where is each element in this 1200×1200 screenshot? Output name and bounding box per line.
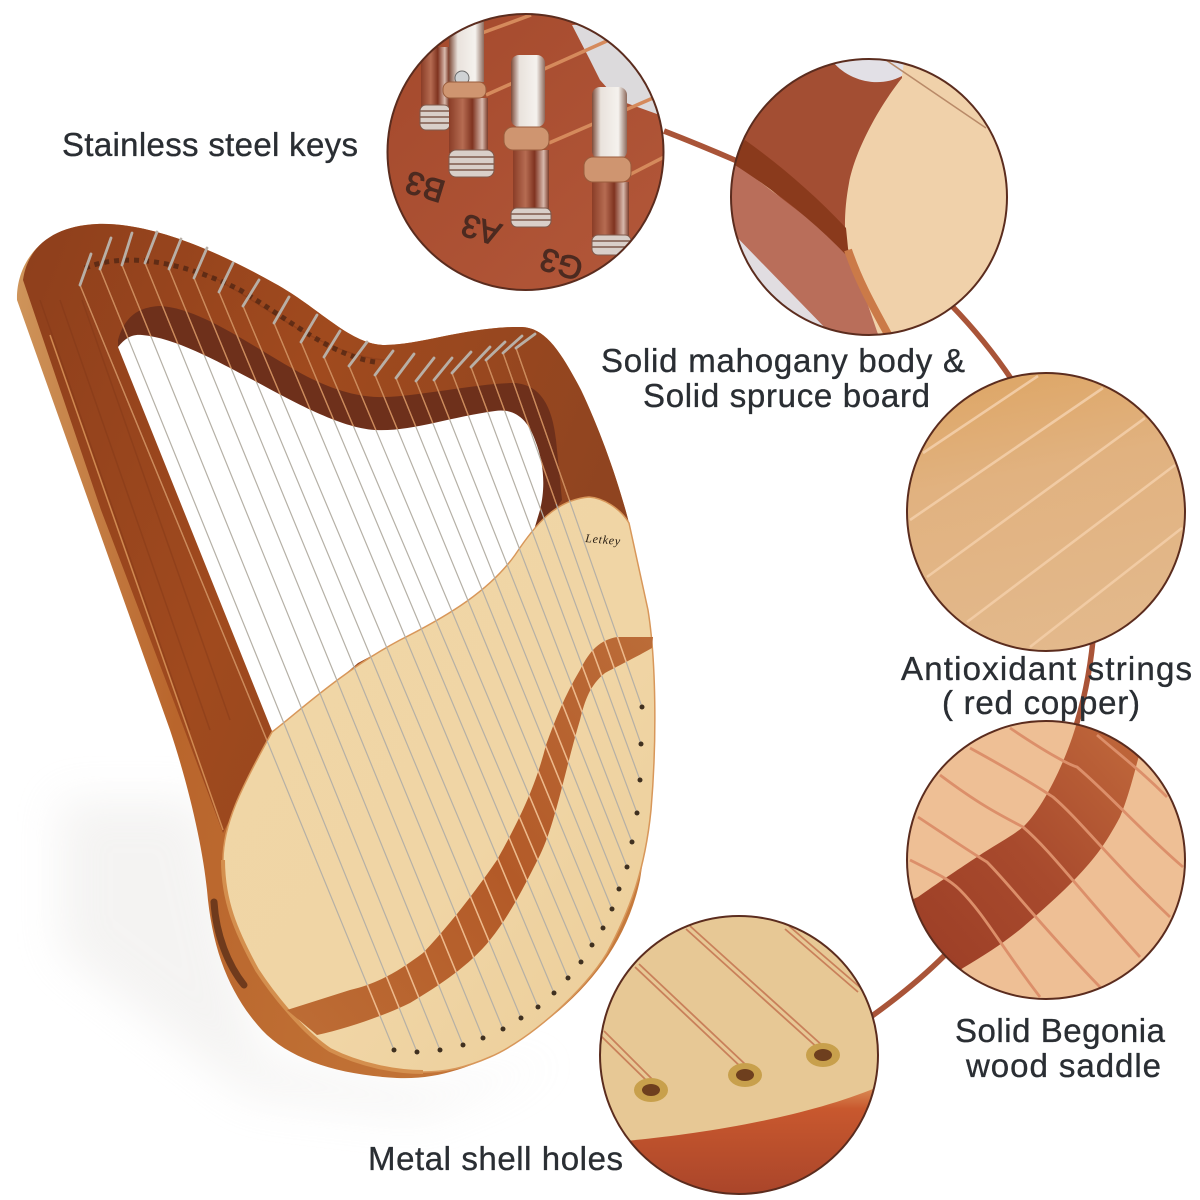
- orange edge: [848, 250, 890, 338]
- detail circle: metal shell holes: [600, 916, 880, 1200]
- frame groove line: [50, 335, 223, 830]
- harp body side: [17, 224, 655, 1078]
- label: mahogany body and spruce board: Solid mahogany body &: [601, 342, 965, 379]
- label: mahogany body and spruce board: Solid spruce board: [643, 377, 930, 414]
- key number markings: A3: [457, 207, 505, 253]
- soundboard: [223, 497, 655, 1072]
- key strings: [482, 15, 666, 175]
- label: saddle: Solid Begonia: [955, 1012, 1166, 1049]
- frame opening: [118, 335, 543, 731]
- label: strings: Antioxidant strings: [901, 650, 1192, 687]
- soundboard lower rim: [223, 860, 423, 1072]
- copper strings: [910, 376, 1182, 647]
- label: strings: [901, 650, 1192, 721]
- background gap lower left: [738, 239, 824, 326]
- tuning pegs: [80, 232, 535, 381]
- label: saddle: [955, 1012, 1166, 1084]
- double strings: [600, 926, 862, 1082]
- saddle: [287, 637, 653, 1035]
- label: mahogany body and spruce board: [601, 342, 965, 414]
- background gap: [572, 24, 658, 114]
- peg holes row: [85, 260, 375, 362]
- dark ridge: [730, 140, 849, 258]
- mahogany side: [732, 166, 878, 334]
- side sound hole: [214, 902, 244, 985]
- key 2: [443, 10, 494, 177]
- mahogany face: [743, 64, 902, 227]
- inner bevel of frame: [118, 306, 562, 530]
- upper string: [886, 60, 986, 128]
- soft shadow under harp: [60, 800, 560, 1115]
- string holes: [392, 704, 644, 1054]
- top gap: [835, 60, 904, 82]
- strings over frame: [80, 264, 570, 742]
- strings: [80, 263, 642, 1052]
- harp front frame: [23, 224, 629, 833]
- detail circle: begonia saddle: [900, 721, 1185, 999]
- key number markings: G3: [536, 241, 587, 288]
- brand logo: Letkey: [584, 531, 621, 548]
- label: saddle: wood saddle: [965, 1047, 1161, 1084]
- key 4: [584, 87, 631, 255]
- key number markings: [406, 172, 582, 279]
- strings over saddle: [366, 637, 627, 1016]
- label: stainless steel keys: Stainless steel keys: [62, 126, 358, 163]
- brass eyelets: [634, 1043, 840, 1102]
- body rim: [630, 1089, 873, 1193]
- label: strings: ( red copper): [942, 684, 1140, 721]
- key number markings: B3: [401, 164, 449, 210]
- saddle band: [914, 725, 1138, 969]
- back key: [420, 47, 450, 130]
- saddle strings: [910, 728, 1183, 997]
- detail circle: stainless steel keys: [380, 10, 670, 295]
- harp illustration: [17, 224, 655, 1078]
- connector lines: [664, 131, 1093, 1016]
- detail circle: mahogany body and spruce board: [725, 50, 1015, 340]
- label: metal shell holes: Metal shell holes: [368, 1140, 623, 1177]
- key 3: [504, 55, 551, 227]
- frame wood grain: [40, 270, 385, 730]
- detail circle: copper strings on board: [907, 373, 1185, 651]
